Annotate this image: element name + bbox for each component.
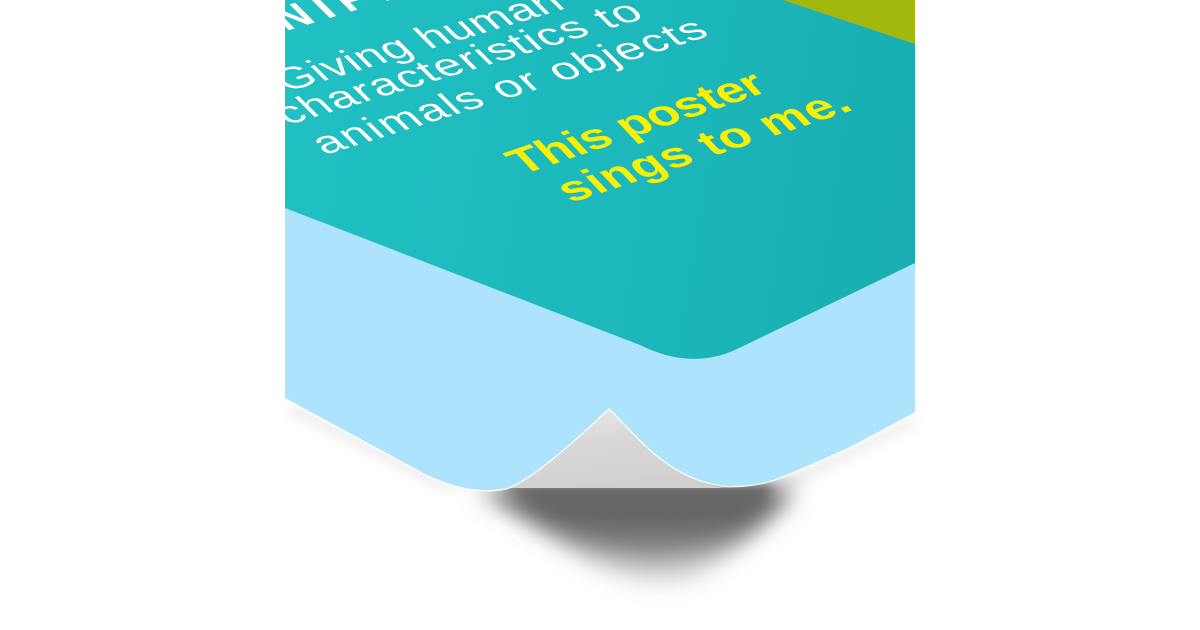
yellow example line 2: sings to me. xyxy=(544,81,861,210)
yellow example line 1: This poster xyxy=(496,63,776,182)
cast shadow xyxy=(290,402,915,581)
olive panel xyxy=(783,0,915,44)
teal panel xyxy=(285,0,915,359)
light blue border xyxy=(285,208,915,490)
poster corner scene xyxy=(285,0,915,591)
curled paper underside xyxy=(507,408,725,488)
definition line 3: animals or objects xyxy=(301,12,717,161)
poster sheet xyxy=(261,0,915,500)
white paper edge xyxy=(285,398,915,490)
